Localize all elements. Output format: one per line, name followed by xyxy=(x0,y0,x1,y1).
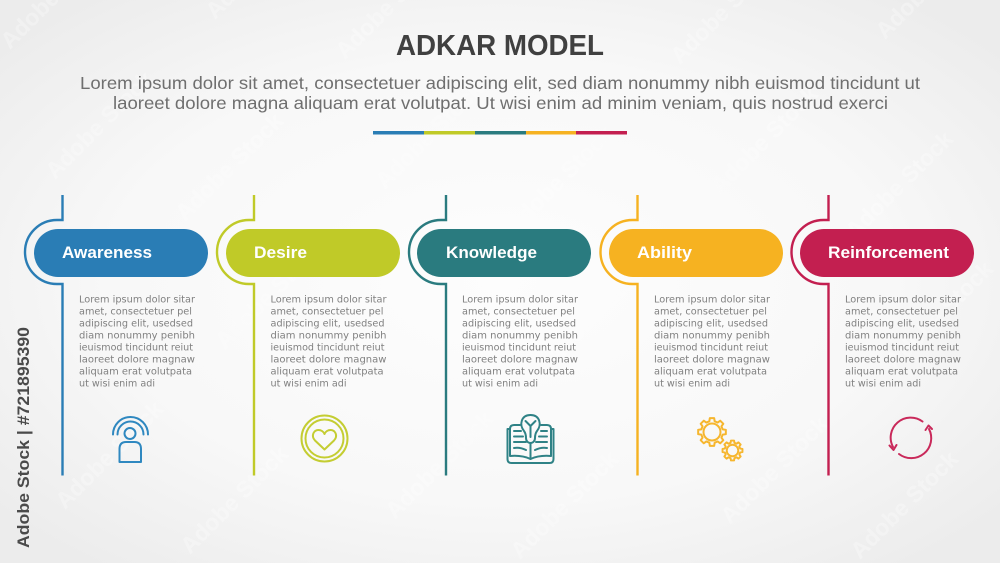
panel: Ability xyxy=(600,195,783,476)
heading pill xyxy=(609,229,783,277)
text: Adobe Stock xyxy=(540,251,658,369)
body text: aliquam erat volutpata xyxy=(462,366,575,378)
body text xyxy=(845,294,961,390)
bracket line xyxy=(600,195,638,476)
bracket line xyxy=(217,195,254,476)
body text: diam nonummy penibh xyxy=(654,330,770,342)
text: Adobe Stock xyxy=(505,446,623,563)
body text: laoreet dolore magnaw xyxy=(270,354,387,366)
body text: ut wisi enim adi xyxy=(845,378,921,390)
text: Adobe Stock xyxy=(210,236,328,354)
text: Adobe Stock xyxy=(845,446,963,563)
heading pill xyxy=(226,229,400,277)
body text: laoreet dolore magnaw xyxy=(462,354,578,366)
body text: adipiscing elit, usedsed xyxy=(79,318,193,330)
body text xyxy=(79,294,195,390)
bracket line xyxy=(792,195,828,476)
body text: amet, consectetuer pel xyxy=(270,306,384,318)
body text xyxy=(462,294,578,390)
body text: laoreet dolore magnaw xyxy=(79,354,195,366)
heading: Awareness xyxy=(62,243,152,262)
body text: amet, consectetuer pel xyxy=(654,306,767,318)
heading: Reinforcement xyxy=(828,243,949,262)
icon: person with signal xyxy=(113,417,148,462)
body text: adipiscing elit, usedsed xyxy=(845,318,959,330)
body text: diam nonummy penibh xyxy=(845,330,961,342)
body text: aliquam erat volutpata xyxy=(845,366,958,378)
body text: Lorem ipsum dolor sitar xyxy=(270,294,387,306)
body text: amet, consectetuer pel xyxy=(845,306,958,318)
subtitle text: laoreet dolore magna aliquam erat volutpat. Ut wisi enim ad minim veniam, quis nostrud exerci xyxy=(113,93,888,113)
body text: ut wisi enim adi xyxy=(270,378,346,390)
heading: Desire xyxy=(254,243,307,262)
icon: book with light bulb xyxy=(508,415,554,463)
subtitle text: Lorem ipsum dolor sit amet, consectetuer adipiscing elit, sed diam nonummy nibh euismod tincidunt ut xyxy=(80,73,920,93)
text: Adobe Stock xyxy=(170,108,288,226)
panel: Desire xyxy=(217,195,400,476)
body text: ieuismod tincidunt reiut xyxy=(79,342,193,354)
bracket line xyxy=(25,195,62,476)
body text: ieuismod tincidunt reiut xyxy=(845,342,959,354)
body text: Lorem ipsum dolor sitar xyxy=(79,294,195,306)
colour divider xyxy=(373,131,627,134)
body text xyxy=(270,294,387,390)
body text xyxy=(654,294,770,390)
body text: diam nonummy penibh xyxy=(270,330,386,342)
vertical stock id text: Adobe Stock | #721895390 xyxy=(14,327,33,548)
body text: ieuismod tincidunt reiut xyxy=(462,342,576,354)
text: Adobe Stock xyxy=(500,121,618,239)
body text: ut wisi enim adi xyxy=(654,378,730,390)
text: Adobe Stock xyxy=(880,256,998,374)
body text: ut wisi enim adi xyxy=(79,378,155,390)
icon: heart in circle xyxy=(302,416,348,462)
text: Adobe Stock xyxy=(840,126,958,244)
body text: diam nonummy penibh xyxy=(462,330,578,342)
body text: laoreet dolore magnaw xyxy=(845,354,961,366)
panel: Reinforcement xyxy=(792,195,974,476)
body text: Lorem ipsum dolor sitar xyxy=(654,294,770,306)
body text: ieuismod tincidunt reiut xyxy=(654,342,768,354)
title: ADKAR MODEL xyxy=(396,30,604,62)
heading pill xyxy=(800,229,974,277)
text: Adobe Stock xyxy=(705,81,823,199)
body text: diam nonummy penibh xyxy=(79,330,195,342)
body text: Lorem ipsum dolor sitar xyxy=(462,294,578,306)
bracket line xyxy=(409,195,446,476)
body text: laoreet dolore magnaw xyxy=(654,354,770,366)
panel: Awareness xyxy=(25,195,208,476)
body text: amet, consectetuer pel xyxy=(462,306,575,318)
heading pill xyxy=(417,229,591,277)
body text: ut wisi enim adi xyxy=(462,378,538,390)
icon: gears xyxy=(698,418,742,460)
body text: Lorem ipsum dolor sitar xyxy=(845,294,961,306)
body text: aliquam erat volutpata xyxy=(270,366,384,378)
text: Adobe Stock xyxy=(50,396,168,514)
text: Adobe Stock xyxy=(380,406,498,524)
panel: Knowledge xyxy=(409,195,591,476)
heading: Knowledge xyxy=(446,243,537,262)
body text: ieuismod tincidunt reiut xyxy=(270,342,385,354)
heading: Ability xyxy=(637,243,693,262)
icon: cycle arrows xyxy=(890,418,932,458)
heading pill xyxy=(34,229,208,277)
text: Adobe Stock xyxy=(370,76,488,194)
body text: aliquam erat volutpata xyxy=(654,366,767,378)
body text: adipiscing elit, usedsed xyxy=(270,318,384,330)
body text: amet, consectetuer pel xyxy=(79,306,192,318)
body text: adipiscing elit, usedsed xyxy=(654,318,768,330)
text: Adobe Stock xyxy=(175,441,293,559)
subtitle text xyxy=(80,73,920,113)
text: Adobe Stock xyxy=(40,66,158,184)
body text: aliquam erat volutpata xyxy=(79,366,192,378)
body text: adipiscing elit, usedsed xyxy=(462,318,576,330)
text: Adobe Stock xyxy=(715,411,833,529)
